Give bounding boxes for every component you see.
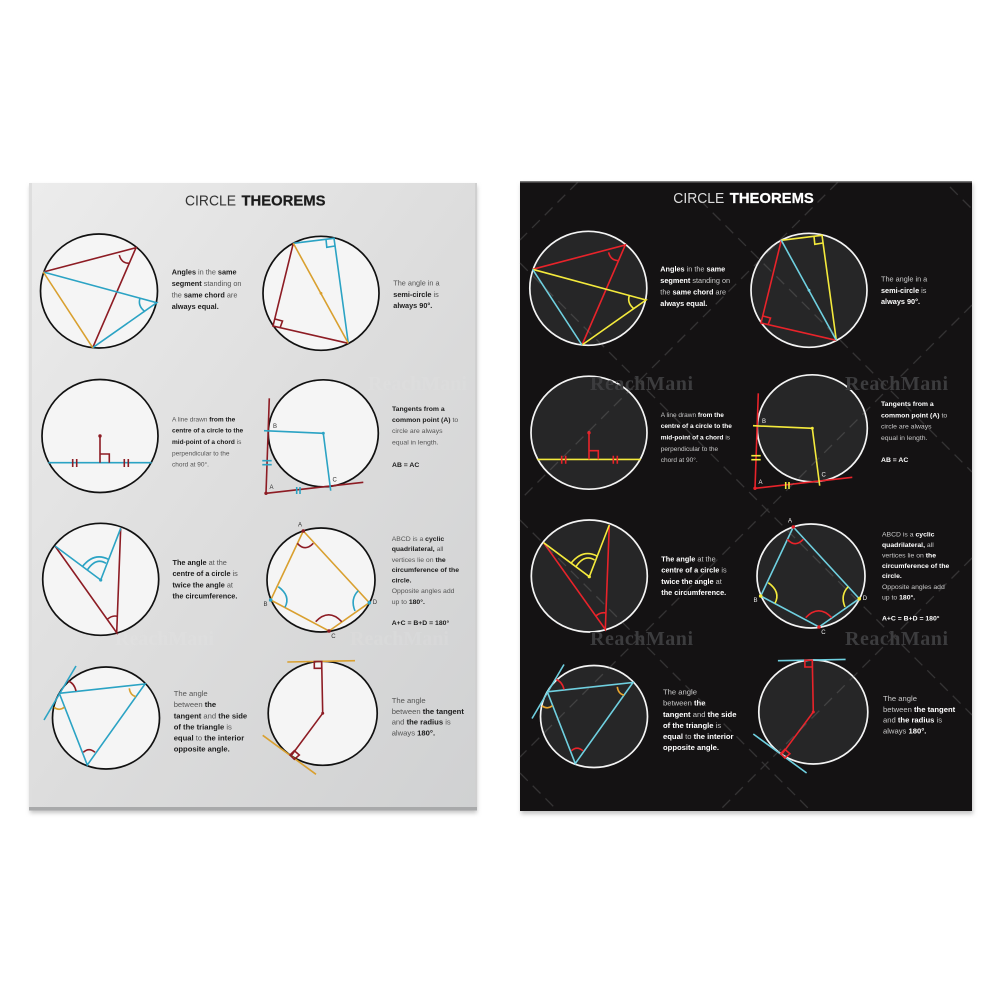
text: semi-circle: always 90°. bbox=[881, 297, 920, 306]
diagram: cyclic quadrilateral: C bbox=[331, 634, 336, 640]
text: cyclic quadrilateral: vertices lie on the bbox=[392, 557, 446, 564]
text: tangent and triangle side: tangent and the side bbox=[663, 710, 736, 719]
diagram: tangent and radius bbox=[263, 661, 377, 774]
text: cyclic quadrilateral: up to 180°. bbox=[882, 594, 915, 602]
text: same segment: always equal. bbox=[172, 302, 219, 311]
text: tangent and triangle side: of the triangle is bbox=[663, 721, 721, 730]
text: same segment: the same chord are bbox=[172, 290, 237, 300]
text: chord mid-point: mid-point of a chord is bbox=[661, 435, 730, 442]
watermark: ReachMani text: ReachMani bbox=[845, 628, 948, 650]
watermark: ReachMani text: ReachMani bbox=[590, 628, 693, 650]
text: tangent and radius: always 180°. bbox=[883, 726, 926, 736]
diagram: cyclic quadrilateral: D bbox=[863, 596, 868, 602]
text: same segment: segment standing on bbox=[660, 276, 730, 285]
diagram: angle at the centre bbox=[43, 523, 159, 635]
diagram: cyclic quadrilateral: D bbox=[373, 600, 378, 606]
diagram: angle in a semi-circle bbox=[263, 236, 379, 350]
diagram: tangents from a common point: A bbox=[758, 480, 763, 486]
text: tangent and triangle side: The angle bbox=[174, 689, 208, 698]
text: tangents: common point (A) to bbox=[392, 417, 458, 424]
text: tangents: circle are always bbox=[392, 428, 443, 435]
watermark: ReachMani text bbox=[590, 373, 948, 650]
text: tangent and radius: The angle bbox=[392, 696, 426, 705]
diagram: tangent and triangle side bbox=[532, 664, 648, 768]
text: cyclic quadrilateral: ABCD is a cyclic bbox=[392, 536, 444, 543]
diagram: tangents from a common point: B bbox=[762, 419, 766, 425]
text: angle at the centre: centre of a circle is bbox=[661, 566, 727, 574]
text: chord mid-point: centre of a circle to the bbox=[172, 428, 244, 434]
text: same segment: the same chord are bbox=[660, 288, 726, 296]
text: angle at the centre: centre of a circle is bbox=[172, 569, 238, 578]
text: tangent and radius: and the radius is bbox=[392, 718, 451, 726]
watermark: ReachMani text: ReachMani bbox=[590, 373, 693, 395]
text: same segment: segment standing on bbox=[172, 279, 241, 288]
title bbox=[185, 194, 326, 210]
diagram: angles in the same segment bbox=[40, 234, 158, 348]
text: same segment: Angles in the same bbox=[172, 268, 237, 276]
watermark: dashed diagonals bbox=[520, 182, 972, 811]
text: semi-circle: semi-circle is bbox=[881, 286, 926, 295]
text: chord mid-point: perpendicular to the bbox=[172, 450, 230, 458]
text: tangent and triangle side: between the bbox=[663, 698, 705, 708]
diagram: tangents from a common point bbox=[751, 375, 867, 490]
text: cyclic quadrilateral: quadrilateral, all bbox=[882, 542, 934, 549]
title: THEOREMS bbox=[242, 194, 326, 210]
text: cyclic quadrilateral: circle. bbox=[392, 578, 412, 584]
text: tangents: Tangents from a bbox=[881, 401, 934, 408]
diagram: centre to chord mid-point bbox=[531, 376, 647, 489]
diagram: cyclic quadrilateral bbox=[264, 522, 378, 640]
text: cyclic quadrilateral: ABCD is a cyclic bbox=[882, 532, 934, 538]
diagram: tangents from a common point: A bbox=[270, 485, 274, 491]
text: tangent and radius: and the radius is bbox=[883, 716, 942, 724]
text: tangents: equal in length. bbox=[881, 435, 928, 442]
text: tangent and triangle side: opposite angle. bbox=[174, 744, 230, 754]
diagram: angle at the centre bbox=[531, 520, 647, 632]
text: semi-circle: The angle in a bbox=[881, 274, 928, 284]
text: angle at the centre: the circumference. bbox=[172, 592, 237, 600]
text: tangents: common point (A) to bbox=[881, 412, 947, 420]
diagram: cyclic quadrilateral: C bbox=[821, 630, 826, 636]
diagram: tangents from a common point bbox=[262, 380, 378, 495]
text: angle at the centre: twice the angle at bbox=[661, 577, 722, 586]
text: angle at the centre: The angle at the bbox=[661, 554, 716, 564]
text: cyclic quadrilateral: circle. bbox=[882, 573, 902, 580]
panel: dark poster bbox=[520, 181, 973, 814]
text: tangents: AB = AC bbox=[392, 462, 419, 469]
watermark: faint ReachMani on light poster: ReachMani bbox=[115, 628, 214, 650]
text: tangent and triangle side: The angle bbox=[663, 688, 697, 697]
text: cyclic quadrilateral: circumference of the bbox=[392, 567, 459, 574]
text: tangent and radius: between the tangent bbox=[392, 707, 464, 716]
text: tangent and triangle side: tangent and the side bbox=[174, 712, 247, 720]
text: chord mid-point: chord at 90°. bbox=[661, 456, 698, 464]
text: semi-circle: The angle in a bbox=[393, 278, 440, 288]
text: cyclic quadrilateral: Opposite angles add bbox=[882, 584, 945, 591]
text: angle at the centre: the circumference. bbox=[661, 588, 726, 597]
panel: light poster bbox=[29, 183, 477, 813]
text: tangent and radius: always 180°. bbox=[392, 728, 435, 738]
text: tangent and triangle side: opposite angle. bbox=[663, 743, 719, 752]
text: cyclic quadrilateral: up to 180°. bbox=[392, 599, 425, 606]
diagram: cyclic quadrilateral: A bbox=[788, 518, 792, 524]
text: angle at the centre: The angle at the bbox=[172, 558, 227, 567]
title bbox=[673, 191, 814, 207]
diagram: angle in a semi-circle bbox=[751, 233, 867, 347]
watermark: ReachMani text: ReachMani bbox=[845, 373, 948, 395]
text: tangents: Tangents from a bbox=[392, 406, 445, 413]
text: semi-circle: semi-circle is bbox=[393, 290, 439, 299]
text: tangents: AB = AC bbox=[881, 457, 908, 464]
title: CIRCLE bbox=[185, 194, 236, 210]
diagram: cyclic quadrilateral: A bbox=[298, 522, 302, 528]
text: cyclic quadrilateral: vertices lie on the bbox=[882, 552, 936, 560]
diagram: tangents from a common point: C bbox=[332, 478, 338, 484]
text: semi-circle: always 90°. bbox=[393, 301, 432, 310]
diagram: cyclic quadrilateral: B bbox=[264, 602, 268, 608]
watermark: faint ReachMani on light poster: ReachMani bbox=[350, 628, 449, 650]
text: chord mid-point: mid-point of a chord is bbox=[172, 439, 241, 446]
text: angle at the centre: twice the angle at bbox=[172, 580, 233, 590]
text: tangent and triangle side: equal to the interior bbox=[174, 734, 244, 742]
watermark: faint ReachMani on light poster: ReachMani bbox=[368, 373, 467, 395]
text: chord mid-point: A line drawn from the bbox=[661, 412, 724, 419]
text: tangent and triangle side: between the bbox=[174, 700, 216, 709]
text: tangent and triangle side: of the triangle is bbox=[174, 722, 232, 732]
diagram: cyclic quadrilateral bbox=[754, 518, 868, 636]
text: cyclic quadrilateral: Opposite angles add bbox=[392, 588, 455, 595]
watermark: faint ReachMani on light poster bbox=[115, 373, 467, 650]
text: tangent and radius: The angle bbox=[883, 694, 917, 703]
text: cyclic quadrilateral: quadrilateral, all bbox=[392, 546, 443, 553]
text: chord mid-point: chord at 90°. bbox=[172, 460, 209, 468]
diagram: tangents from a common point: C bbox=[822, 472, 826, 478]
text: tangent and radius: between the tangent bbox=[883, 705, 955, 714]
text: tangents: equal in length. bbox=[392, 440, 439, 446]
text: same segment: Angles in the same bbox=[660, 264, 725, 274]
diagram: tangent and triangle side bbox=[44, 666, 160, 769]
text: cyclic quadrilateral: A+C = B+D = 180° bbox=[882, 614, 940, 622]
diagram: centre to chord mid-point bbox=[42, 380, 158, 492]
text: same segment: always equal. bbox=[660, 299, 707, 308]
diagram: cyclic quadrilateral: B bbox=[754, 598, 758, 604]
diagram: angles in the same segment bbox=[530, 231, 647, 345]
title: CIRCLE bbox=[673, 191, 725, 207]
text: chord mid-point: perpendicular to the bbox=[661, 446, 719, 453]
text: tangent and triangle side: equal to the interior bbox=[663, 732, 734, 741]
text: cyclic quadrilateral: circumference of the bbox=[882, 563, 950, 570]
title: THEOREMS bbox=[730, 191, 814, 207]
text: chord mid-point: centre of a circle to the bbox=[661, 423, 732, 430]
diagram: tangent and radius bbox=[753, 659, 868, 773]
text: chord mid-point: A line drawn from the bbox=[172, 416, 235, 424]
diagram: tangents from a common point: B bbox=[273, 424, 277, 430]
text: tangents: circle are always bbox=[881, 424, 932, 431]
text: cyclic quadrilateral: A+C = B+D = 180° bbox=[392, 619, 449, 627]
